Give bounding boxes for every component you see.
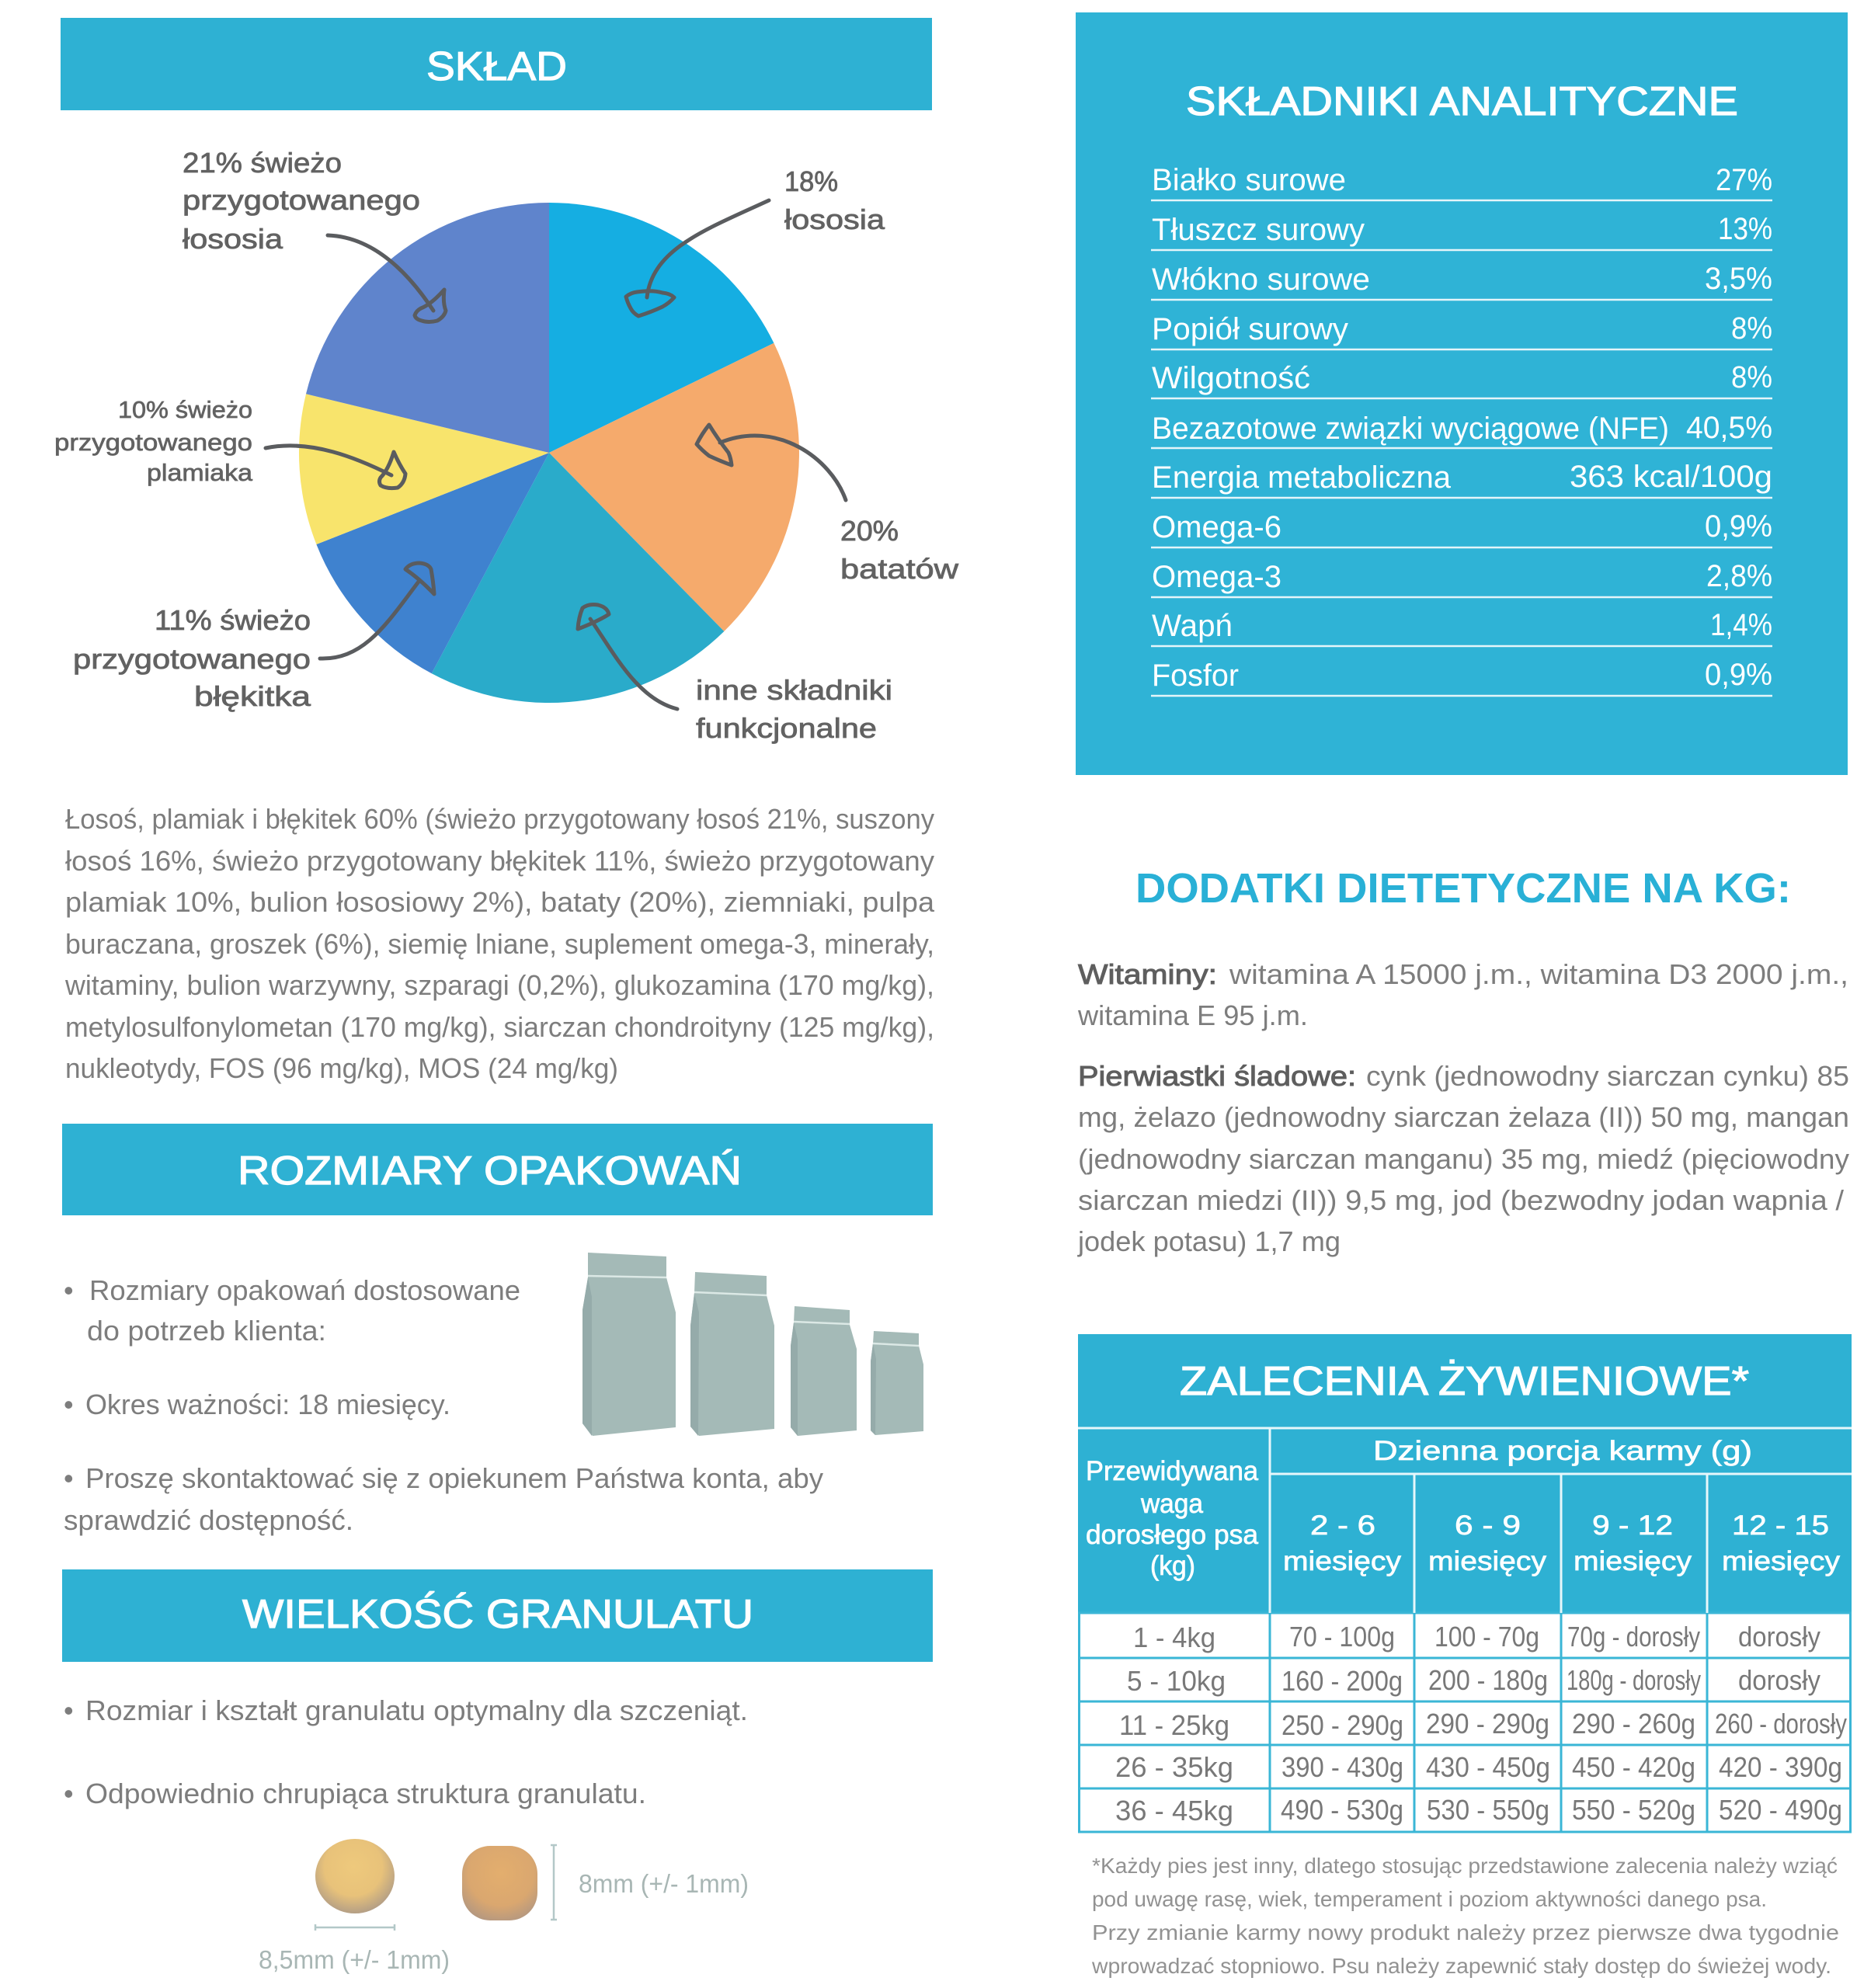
table row: 36-45 kg: 550 - 520g <box>1572 1794 1695 1826</box>
pie chart <box>299 203 799 703</box>
rows: nutrient values: 2,8% <box>1706 559 1772 593</box>
label: inne składniki funkcjonalne: funkcjonalne <box>696 712 877 744</box>
text block: kibble bullets: • <box>64 1694 74 1726</box>
text block: ingredients <box>64 803 935 1084</box>
dimension: 8,5mm: 8,5mm (+/- 1mm) <box>259 1945 450 1974</box>
heading: dodatki dietetyczne: DODATKI DIETETYCZNE NA KG: <box>1135 865 1791 912</box>
rows: nutrient values: 27% <box>1716 163 1772 197</box>
text block: ingredients: metylosulfonylometan (170 mg/kg), siarczan chondroityny (125 mg/kg), <box>65 1011 934 1043</box>
rows: nutrient values: 13% <box>1718 212 1772 246</box>
text block: ingredients: nukleotydy, FOS (96 mg/kg), MOS (24 mg/kg) <box>65 1052 618 1084</box>
panel: wielkość granulatu <box>62 1569 933 1974</box>
label: 18% łososia: 18% <box>784 165 838 197</box>
table header: weight column: (kg) <box>1150 1551 1195 1581</box>
table row: 1-4 kg: 70g - dorosły <box>1567 1621 1700 1653</box>
text block: ingredients: łosoś 16%, świeżo przygotowany błękitek 11%, świeżo przygotowany <box>65 845 934 877</box>
text block: kibble bullets: Rozmiar i kształt granulatu optymalny dla szczeniąt. <box>85 1694 748 1726</box>
table row: 36-45 kg: 36 - 45kg <box>1115 1795 1233 1826</box>
heading: skład: SKŁAD <box>426 44 567 89</box>
rows: nutrient values: 8% <box>1731 311 1772 346</box>
text block: packaging bullets: • <box>64 1388 74 1420</box>
panel: skład <box>54 18 959 1084</box>
footnote <box>1091 1854 1839 1978</box>
text block: packaging bullets: • <box>64 1274 74 1306</box>
text block: packaging bullets: sprawdzić dostępność. <box>64 1504 353 1536</box>
text block: witaminy: witamina A 15000 j.m., witamina D3 2000 j.m., <box>1229 958 1848 990</box>
label: 21% świeżo przygotowanego łososia <box>183 147 420 255</box>
table header: age columns: miesięcy <box>1283 1546 1402 1576</box>
text block: ingredients: plamiak 10%, bulion łososiowy 2%), bataty (20%), ziemniaki, pulpa <box>65 886 935 918</box>
text block: pierwiastki śladowe: cynk (jednowodny siarczan cynku) 85 <box>1366 1060 1849 1092</box>
text block: pierwiastki śladowe: Pierwiastki śladowe: <box>1078 1060 1356 1092</box>
text block: ingredients: Łosoś, plamiak i błękitek 60% (świeżo przygotowany łosoś 21%, suszony <box>65 803 934 835</box>
text block: packaging bullets: • <box>64 1462 74 1494</box>
rows: nutrient values: Omega-3 <box>1152 560 1281 594</box>
table header: weight column: dorosłego psa <box>1086 1520 1259 1550</box>
footnote: Przy zmianie karmy nowy produkt należy przez pierwsze dwa tygodnie <box>1092 1920 1839 1945</box>
label: 10% świeżo przygotowanego plamiaka: 10% świeżo <box>118 396 252 423</box>
rows: nutrient values: 8% <box>1731 360 1772 394</box>
icon: package bags <box>582 1253 923 1436</box>
label: inne składniki funkcjonalne <box>696 674 892 744</box>
text block: witaminy: Witaminy: <box>1078 958 1217 990</box>
table header: age columns: 6 - 9 <box>1455 1510 1521 1541</box>
table row: 11-25 kg: 290 - 290g <box>1426 1708 1549 1740</box>
heading: rozmiary opakowań: ROZMIARY OPAKOWAŃ <box>238 1149 742 1194</box>
text block: packaging bullets: do potrzeb klienta: <box>87 1315 326 1347</box>
table header: age columns: 9 - 12 <box>1592 1510 1673 1541</box>
label: 20% batatów: batatów <box>840 553 959 585</box>
text block: packaging bullets <box>64 1274 823 1536</box>
text block: pierwiastki śladowe: jodek potasu) 1,7 mg <box>1077 1225 1341 1257</box>
dimension: 8,5mm <box>259 1924 450 1974</box>
rows: nutrient values: 40,5% <box>1686 411 1772 445</box>
table row: 26-35 kg: 26 - 35kg <box>1115 1751 1233 1783</box>
table row: 5-10 kg: 200 - 180g <box>1428 1664 1548 1696</box>
rows: nutrient values <box>1151 163 1772 696</box>
text block: ingredients: buraczana, groszek (6%), siemię lniane, suplement omega-3, minerały, <box>65 928 934 960</box>
table row: 5-10 kg: dorosły <box>1738 1664 1820 1696</box>
rows: nutrient values: Wilgotność <box>1152 361 1310 395</box>
table row: 26-35 kg: 390 - 430g <box>1281 1751 1403 1783</box>
icon: square kibble <box>462 1846 537 1920</box>
table row: 5-10 kg <box>1127 1664 1820 1697</box>
rows: nutrient values: Tłuszcz surowy <box>1152 213 1365 247</box>
table row: 11-25 kg: 250 - 290g <box>1281 1709 1403 1741</box>
table row: 26-35 kg: 450 - 420g <box>1572 1751 1695 1783</box>
table row: 1-4 kg: 100 - 70g <box>1434 1621 1539 1653</box>
label: 18% łososia: łososia <box>784 203 885 235</box>
table row: 36-45 kg: 520 - 490g <box>1719 1794 1842 1826</box>
dimension: 8mm: 8mm (+/- 1mm) <box>579 1869 749 1898</box>
footnote: wprowadzać stopniowo. Psu należy zapewnić stały dostęp do świeżej wody. <box>1091 1954 1831 1978</box>
text block: ingredients: witaminy, bulion warzywny, szparagi (0,2%), glukozamina (170 mg/kg), <box>64 969 934 1001</box>
table row: 1-4 kg: 70 - 100g <box>1289 1621 1395 1653</box>
heading: skład <box>61 18 932 110</box>
label: 20% batatów <box>840 515 959 585</box>
table row: 36-45 kg: 530 - 550g <box>1427 1794 1549 1826</box>
table row: 26-35 kg: 420 - 390g <box>1719 1751 1842 1783</box>
label: 11% świeżo przygotowanego błękitka <box>73 604 311 712</box>
rows: nutrient values: 0,9% <box>1705 509 1772 544</box>
rows: nutrient values: 3,5% <box>1705 262 1772 296</box>
table row: 36-45 kg <box>1115 1794 1842 1826</box>
text block: witaminy: witamina E 95 j.m. <box>1077 999 1308 1031</box>
panel: rozmiary opakowań <box>62 1124 933 1536</box>
rows: nutrient values: 0,9% <box>1705 658 1772 692</box>
text block: kibble bullets <box>64 1694 748 1809</box>
arrow: 11% błękitka <box>320 563 434 659</box>
label: 11% świeżo przygotowanego błękitka: błękitka <box>194 680 311 712</box>
table row: 11-25 kg <box>1119 1708 1847 1741</box>
rows: nutrient values: Wapń <box>1152 609 1233 643</box>
text block: pierwiastki śladowe: (jednowodny siarczan manganu) 35 mg, miedź (pięciowodny <box>1078 1143 1849 1175</box>
table row: 11-25 kg: 290 - 260g <box>1572 1708 1695 1740</box>
text block: packaging bullets: Proszę skontaktować się z opiekunem Państwa konta, aby <box>85 1462 823 1494</box>
footnote: pod uwagę rasę, wiek, temperament i poziom aktywności danego psa. <box>1092 1887 1767 1911</box>
rows: nutrient values: Włókno surowe <box>1152 262 1370 297</box>
dimension: 8mm <box>551 1845 749 1920</box>
table header: weight column: waga <box>1140 1489 1204 1519</box>
heading: zalecenia żywieniowe: ZALECENIA ŻYWIENIOWE* <box>1180 1359 1749 1404</box>
text block: pierwiastki śladowe: siarczan miedzi (II)) 9,5 mg, jod (bezwodny jodan wapnia / <box>1078 1184 1844 1216</box>
table row: 5-10 kg: 160 - 200g <box>1281 1665 1403 1697</box>
table row: 1-4 kg: 1 - 4kg <box>1133 1621 1215 1653</box>
rows: nutrient values: Popiół surowy <box>1152 312 1348 346</box>
table row: 5-10 kg: 5 - 10kg <box>1127 1665 1226 1697</box>
table header: daily portion: Dzienna porcja karmy (g) <box>1373 1436 1752 1466</box>
table row: 1-4 kg: dorosły <box>1738 1621 1820 1653</box>
table row: 26-35 kg <box>1115 1751 1842 1783</box>
label: 10% świeżo przygotowanego plamiaka <box>54 396 253 486</box>
label: 11% świeżo przygotowanego błękitka: przygotowanego <box>73 643 311 675</box>
label: 10% świeżo przygotowanego plamiaka: plamiaka <box>147 459 253 486</box>
rows: nutrient values: Fosfor <box>1152 659 1239 693</box>
table header: age columns: 12 - 15 <box>1732 1510 1829 1541</box>
text block: witaminy <box>1077 958 1848 1031</box>
footnote: *Każdy pies jest inny, dlatego stosując przedstawione zalecenia należy wziąć <box>1092 1854 1838 1878</box>
heading: wielkość granulatu: WIELKOŚĆ GRANULATU <box>242 1591 753 1637</box>
table header: age columns: miesięcy <box>1722 1546 1841 1576</box>
label: inne składniki funkcjonalne: inne składniki <box>696 674 892 706</box>
table header: age columns: 2 - 6 <box>1310 1510 1375 1541</box>
arrow: 20% batatów <box>697 425 846 500</box>
table row: 26-35 kg: 430 - 450g <box>1426 1751 1550 1783</box>
text block: packaging bullets: Okres ważności: 18 miesięcy. <box>85 1388 450 1420</box>
heading: składniki analityczne: SKŁADNIKI ANALITYCZNE <box>1186 79 1738 124</box>
rows: nutrient values: 363 kcal/100g <box>1570 460 1772 494</box>
label: 11% świeżo przygotowanego błękitka: 11% świeżo <box>155 604 311 636</box>
rows: nutrient values: Bezazotowe związki wyciągowe (NFE) <box>1152 412 1669 446</box>
text block: packaging bullets: Rozmiary opakowań dostosowane <box>89 1274 520 1306</box>
label: 18% łososia <box>784 165 885 235</box>
text block: pierwiastki śladowe <box>1077 1060 1849 1257</box>
text block: kibble bullets: Odpowiednio chrupiąca struktura granulatu. <box>85 1778 646 1809</box>
table header: age columns: miesięcy <box>1574 1546 1692 1576</box>
panel: zalecenia żywieniowe <box>1078 1334 1852 1978</box>
heading: wielkość granulatu <box>62 1569 933 1662</box>
panel: składniki analityczne <box>1076 12 1848 775</box>
arrow: inne składniki <box>578 604 677 709</box>
table row: 36-45 kg: 490 - 530g <box>1281 1794 1403 1826</box>
rows: nutrient values: Omega-6 <box>1152 510 1281 544</box>
arrow: 21% łososia <box>328 235 446 321</box>
table header: weight column <box>1086 1456 1259 1581</box>
rows: nutrient values: Białko surowe <box>1152 163 1346 197</box>
text block: pierwiastki śladowe: mg, żelazo (jednowodny siarczan żelaza (II)) 50 mg, mangan <box>1078 1101 1849 1133</box>
icon: round kibble <box>315 1839 395 1913</box>
arrow: 18% łososia <box>626 200 769 316</box>
table row: 11-25 kg: 11 - 25kg <box>1119 1709 1229 1741</box>
label: 21% świeżo przygotowanego łososia: 21% świeżo <box>183 147 342 179</box>
table grid <box>1078 1428 1852 1832</box>
text block: kibble bullets: • <box>64 1778 74 1809</box>
table header: age columns: miesięcy <box>1428 1546 1547 1576</box>
label: 10% świeżo przygotowanego plamiaka: przygotowanego <box>54 429 252 456</box>
panel: dodatki dietetyczne <box>1077 865 1849 1257</box>
rows: nutrient values: 1,4% <box>1710 608 1772 642</box>
rows: nutrient values: Energia metaboliczna <box>1152 461 1452 495</box>
table row: 1-4 kg <box>1133 1621 1820 1653</box>
label: 21% świeżo przygotowanego łososia: łososia <box>183 223 283 255</box>
label: 21% świeżo przygotowanego łososia: przygotowanego <box>183 184 420 216</box>
heading: rozmiary opakowań <box>62 1124 933 1215</box>
table header: weight column: Przewidywana <box>1086 1456 1259 1486</box>
label: 20% batatów: 20% <box>840 515 899 547</box>
arrow: 10% plamiaka <box>266 446 405 488</box>
table row: 5-10 kg: 180g - dorosły <box>1567 1664 1701 1696</box>
table header: age columns <box>1283 1510 1841 1576</box>
